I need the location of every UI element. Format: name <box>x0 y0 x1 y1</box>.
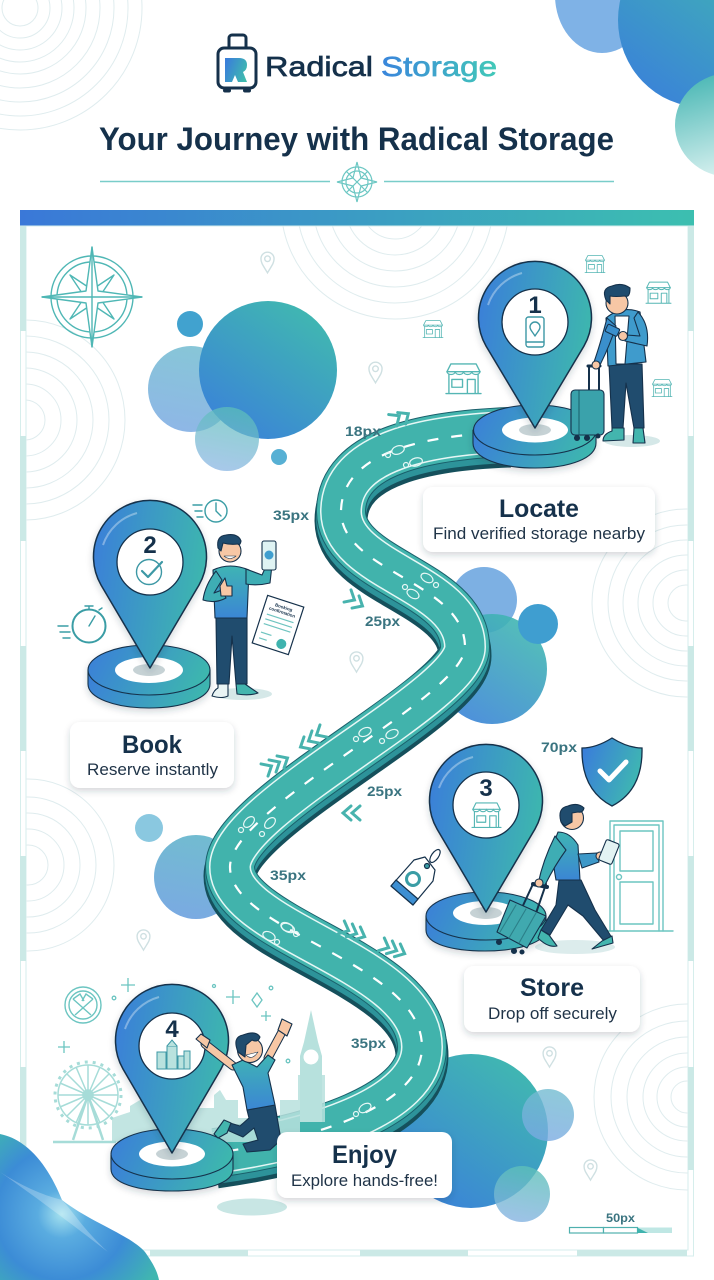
pin 3 <box>430 744 542 912</box>
head <box>238 1038 262 1062</box>
header bar <box>20 210 694 226</box>
shop icons around step 1 <box>423 256 672 397</box>
icon: london eye <box>53 1062 121 1142</box>
step 3: store <box>391 738 673 1032</box>
pin 1: 1 <box>528 292 542 319</box>
icon: stopwatch <box>58 606 106 642</box>
pin 2: 2 <box>143 532 157 559</box>
pin 2 <box>93 500 207 668</box>
step 2: book <box>58 500 304 788</box>
label card: enjoy <box>277 1132 452 1198</box>
luggage tag <box>391 848 442 905</box>
top-right decorative blobs <box>555 0 714 177</box>
decorative circles: bottom <box>394 1054 574 1222</box>
icon: check circle <box>136 560 162 584</box>
pin 3: 3 <box>479 775 493 802</box>
label card: book: Reserve instantly <box>87 760 219 779</box>
label card: locate <box>423 487 655 552</box>
label card: book <box>70 722 234 788</box>
jeans <box>227 1105 281 1152</box>
pedestal 3 <box>426 892 546 951</box>
panel frame <box>20 226 694 1256</box>
icon: small compass <box>337 162 377 202</box>
decorative circles: lower <box>135 814 238 919</box>
document: booking confirmation: confirmation <box>268 606 296 619</box>
distance labels: 70px <box>541 739 577 755</box>
label card: locate: Locate <box>499 495 579 523</box>
label card: locate: Find verified storage nearby <box>433 524 645 543</box>
person shadow <box>212 688 272 700</box>
distance labels: 35px <box>270 867 306 883</box>
person 4 <box>196 1019 292 1152</box>
pedestal shadow <box>217 1198 287 1216</box>
shoe <box>214 1120 231 1138</box>
distance labels: 25px <box>367 783 402 799</box>
hands <box>196 1034 210 1048</box>
big ben <box>300 1010 322 1122</box>
suitcase 1 <box>571 366 604 440</box>
step 1: locate <box>423 261 660 552</box>
bottom-left decorative blob <box>0 1134 159 1280</box>
top-left concentric rings <box>0 0 142 130</box>
pedestal 1 <box>473 405 596 468</box>
footprints on road <box>238 444 438 1117</box>
logo <box>218 35 497 90</box>
road side depth <box>215 441 510 1162</box>
winding road <box>215 432 510 1162</box>
shield icon <box>582 738 642 806</box>
distance labels: 50px <box>606 1211 635 1225</box>
pedestal 4 <box>111 1129 233 1191</box>
scenery: small map pins <box>137 252 597 1180</box>
shirt <box>232 1055 275 1110</box>
distance labels: 35px <box>351 1035 386 1051</box>
left arm <box>205 1044 233 1066</box>
london skyline <box>112 1010 325 1142</box>
distance labels: 18px <box>345 423 381 439</box>
door <box>601 821 673 931</box>
person shadow <box>604 435 660 447</box>
person 1 <box>592 284 648 443</box>
icon: flags badge <box>65 987 101 1023</box>
label card: store: Drop off securely <box>488 1004 617 1023</box>
icon: large compass rose <box>42 247 142 347</box>
panel background rings <box>26 226 688 1190</box>
label card: book: Book <box>122 731 182 759</box>
icon: city <box>157 1040 190 1069</box>
road edge lines <box>215 432 510 1153</box>
right arm <box>268 1032 282 1058</box>
label card: enjoy: Enjoy <box>332 1141 397 1169</box>
person 3 <box>535 804 620 949</box>
person shadow <box>535 940 615 954</box>
scale bar <box>570 1228 672 1233</box>
distance labels: 35px <box>273 507 309 523</box>
icon: shop <box>472 803 501 827</box>
icon: phone with pin <box>526 317 544 347</box>
logo text: Radical <box>265 51 373 82</box>
document: booking confirmation: Booking <box>274 602 293 613</box>
document: booking confirmation <box>252 595 304 655</box>
direction chevrons <box>261 408 412 960</box>
pedestal 2 <box>88 645 210 708</box>
label card: store <box>464 966 640 1032</box>
logo text accent: Storage <box>381 51 497 82</box>
label card: store: Store <box>520 974 584 1002</box>
distance labels: 25px <box>365 613 400 629</box>
suitcase 3 <box>496 884 547 954</box>
distance labels <box>270 423 635 1225</box>
pin 4: 4 <box>165 1016 179 1043</box>
road surface <box>215 432 510 1153</box>
title divider with compass <box>100 162 614 202</box>
step 4: enjoy <box>53 978 452 1216</box>
pin 1 <box>478 261 592 428</box>
decorative circles: middle <box>437 567 558 724</box>
title: Your Journey with Radical Storage <box>99 121 614 157</box>
logo icon: suitcase <box>218 35 256 90</box>
sparkles <box>58 978 290 1063</box>
pin 4 <box>115 984 229 1153</box>
label card: enjoy: Explore hands-free! <box>291 1171 438 1190</box>
person 2 <box>203 535 276 698</box>
road centre dashes <box>215 432 510 1153</box>
icon: clock <box>193 500 227 522</box>
decorative circles: upper <box>148 301 337 471</box>
